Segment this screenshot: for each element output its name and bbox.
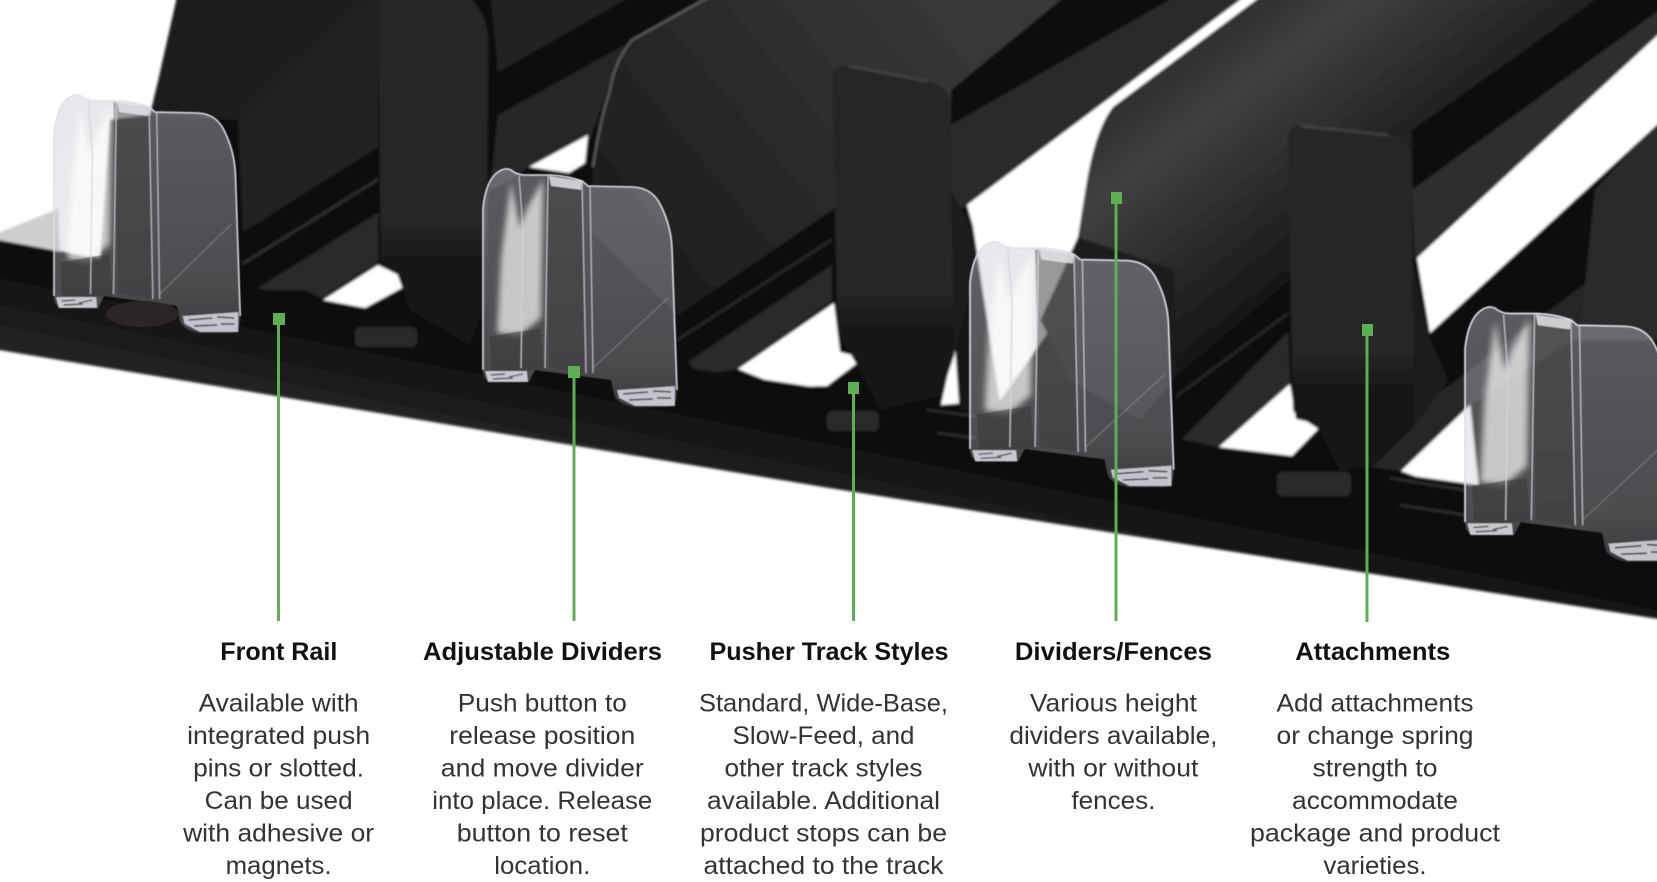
tall slab divider 2 [832, 65, 954, 410]
body text: dividers and fences: with or without [1027, 755, 1198, 783]
white stripe 1 [941, 0, 1272, 405]
body text: front rail: magnets. [226, 852, 332, 880]
body text: pusher track styles: Slow-Feed, and [732, 722, 914, 750]
fence 2 [590, 0, 1075, 315]
body text: dividers and fences: fences. [1071, 787, 1155, 815]
white gap 4 [1219, 384, 1322, 456]
callout line: pusher track styles [848, 382, 859, 621]
heading: attachments: Attachments [1295, 638, 1450, 666]
heading: adjustable dividers: Adjustable Dividers [423, 638, 662, 666]
callout line: front rail [273, 313, 285, 621]
gray track strip between slab and fence 2 [490, 45, 625, 190]
heading: front rail: Front Rail [220, 638, 337, 666]
track strip below fence 3 [1182, 332, 1290, 447]
white gap 1 [323, 265, 413, 308]
body text: front rail: Can be used [205, 787, 353, 815]
gray strip right of second slab [951, 0, 1256, 215]
body text: front rail [182, 690, 374, 880]
white gap 5 [1401, 405, 1480, 500]
dark fence remains over stripe 1 [1040, 237, 1176, 420]
fence 5 at right edge [1580, 106, 1657, 340]
body text: front rail: Available with [199, 690, 359, 718]
tall slab divider 1 [378, 0, 488, 345]
callout line: dividers and fences [1111, 192, 1122, 621]
body text: pusher track styles: available. Additional [707, 787, 940, 815]
body text: attachments: strength to [1312, 755, 1438, 783]
body text: adjustable dividers: and move divider [441, 755, 644, 783]
body text: front rail: with adhesive or [182, 820, 374, 848]
body text: adjustable dividers: into place. Release [432, 787, 652, 815]
base chip under divider 1 [106, 301, 178, 327]
white gap 3 [738, 303, 864, 387]
callout line: adjustable dividers [568, 366, 580, 621]
body text: dividers and fences: dividers available, [1009, 722, 1217, 750]
body text: adjustable dividers: location. [494, 852, 590, 880]
body text: attachments [1250, 690, 1500, 880]
column: front rail [182, 638, 374, 880]
heading: dividers and fences: Dividers/Fences [1015, 638, 1212, 666]
rail highlight lines [927, 410, 1465, 515]
tall slab divider 3 [1288, 125, 1414, 470]
body text: adjustable dividers: Push button to [458, 690, 627, 718]
body text: adjustable dividers: button to reset [457, 820, 628, 848]
column: dividers and fences [1009, 638, 1217, 815]
body text: dividers and fences: Various height [1030, 690, 1197, 718]
strip below white stripe [1372, 280, 1590, 471]
fence 3 [1080, 0, 1612, 376]
clear adjustable divider 2 [483, 169, 677, 407]
body text: attachments: Add attachments [1276, 690, 1474, 718]
body text: front rail: integrated push [187, 722, 370, 750]
body text: pusher track styles: product stops can be [700, 820, 947, 848]
body text: adjustable dividers: release position [449, 722, 635, 750]
clear adjustable divider 3 [970, 242, 1174, 487]
body text: pusher track styles: attached to the track [704, 852, 944, 880]
front rail [0, 238, 1657, 621]
track strip below fence 2 [688, 265, 832, 375]
column: adjustable dividers [423, 638, 662, 880]
body text: dividers and fences [1009, 690, 1217, 815]
body text: pusher track styles: Standard, Wide-Base, [699, 690, 948, 718]
column: attachments [1250, 638, 1500, 880]
product photo: pusher tray [0, 0, 1657, 621]
photo base: dark tray body [0, 0, 1657, 621]
upper area behind first slab [490, 0, 645, 72]
clear adjustable divider 4 [1465, 307, 1657, 562]
body text: attachments: varieties. [1324, 852, 1426, 880]
left light strip [0, 209, 60, 252]
body text: attachments: accommodate [1292, 787, 1458, 815]
body text: adjustable dividers [432, 690, 652, 880]
rail push pins [355, 327, 417, 347]
tapered slab wing [1412, 257, 1448, 427]
body text: attachments: or change spring [1276, 722, 1474, 750]
column: pusher track styles [699, 638, 948, 880]
body text: pusher track styles: other track styles [724, 755, 922, 783]
body text: attachments: package and product [1250, 820, 1500, 848]
white gap 2 [529, 135, 588, 173]
body text: front rail: pins or slotted. [193, 755, 364, 783]
gray strip right of third slab [1412, 1, 1657, 257]
callout line: attachments [1362, 324, 1373, 622]
clear adjustable divider 1 [54, 95, 240, 333]
heading: pusher track styles: Pusher Track Styles [710, 638, 948, 666]
track strip beside fence 1 [255, 213, 378, 298]
white stripe 2 [1417, 22, 1657, 333]
body text: pusher track styles [699, 690, 948, 880]
fence 1 [150, 0, 378, 232]
